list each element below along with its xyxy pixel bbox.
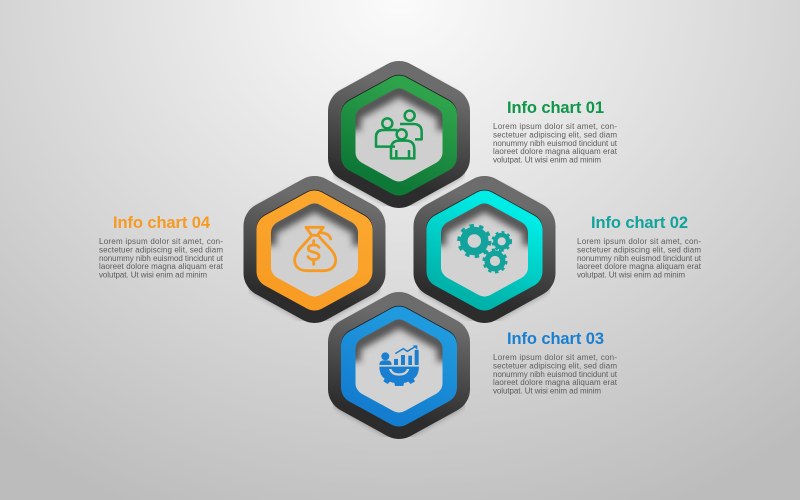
text block: chart 03: sectetuer adipiscing elit, sed diam — [493, 361, 617, 370]
icon: people — [376, 111, 422, 158]
text block: chart 02: volutpat. Ut wisi enim ad minim — [577, 271, 685, 280]
text block: chart 04: sectetuer adipiscing elit, sed diam — [99, 245, 223, 254]
icon: gear with chart and person — [379, 345, 419, 386]
heading: Info chart 02: Info chart 02 — [591, 214, 688, 232]
text block: chart 04 — [99, 237, 224, 280]
text block: chart 02: nonummy nibh euismod tincidunt ut — [577, 254, 702, 263]
text block: chart 03: nonummy nibh euismod tincidunt ut — [493, 370, 618, 379]
text block: chart 03 — [493, 353, 618, 396]
text block: chart 02: laoreet dolore magna aliquam erat — [577, 262, 702, 271]
text block: chart 04: volutpat. Ut wisi enim ad minim — [99, 271, 207, 280]
text block: chart 03: volutpat. Ut wisi enim ad minim — [493, 387, 601, 396]
heading: Info chart 04: Info chart 04 — [113, 214, 211, 232]
text block: chart 04: laoreet dolore magna aliquam erat — [99, 262, 224, 271]
text block: chart 04: nonummy nibh euismod tincidunt ut — [99, 254, 224, 263]
panel: hexagon 03 blue — [339, 306, 459, 426]
text block: chart 01: volutpat. Ut wisi enim ad minim — [493, 156, 601, 165]
panel: hexagon 01 green — [339, 74, 459, 194]
icon: gears — [459, 226, 511, 272]
text block: chart 01 — [493, 122, 618, 165]
text block: chart 02: sectetuer adipiscing elit, sed diam — [577, 245, 701, 254]
text block: chart 01: Lorem ipsum dolor sit amet, con- — [493, 122, 617, 131]
panel: hexagon 04 orange — [254, 190, 374, 310]
text block: chart 01: sectetuer adipiscing elit, sed diam — [493, 130, 617, 139]
text block: chart 01: laoreet dolore magna aliquam erat — [493, 147, 618, 156]
icon: money bag — [295, 227, 336, 271]
text block: chart 03: laoreet dolore magna aliquam erat — [493, 378, 618, 387]
text block: chart 02 — [577, 237, 702, 280]
text block: chart 01: nonummy nibh euismod tincidunt ut — [493, 139, 618, 148]
text block: chart 03: Lorem ipsum dolor sit amet, con- — [493, 353, 617, 362]
heading: Info chart 01: Info chart 01 — [507, 99, 604, 117]
heading: Info chart 03: Info chart 03 — [507, 330, 604, 348]
text block: chart 04: Lorem ipsum dolor sit amet, con- — [99, 237, 223, 246]
panel: hexagon 02 teal — [424, 190, 544, 310]
text block: chart 02: Lorem ipsum dolor sit amet, con- — [577, 237, 701, 246]
